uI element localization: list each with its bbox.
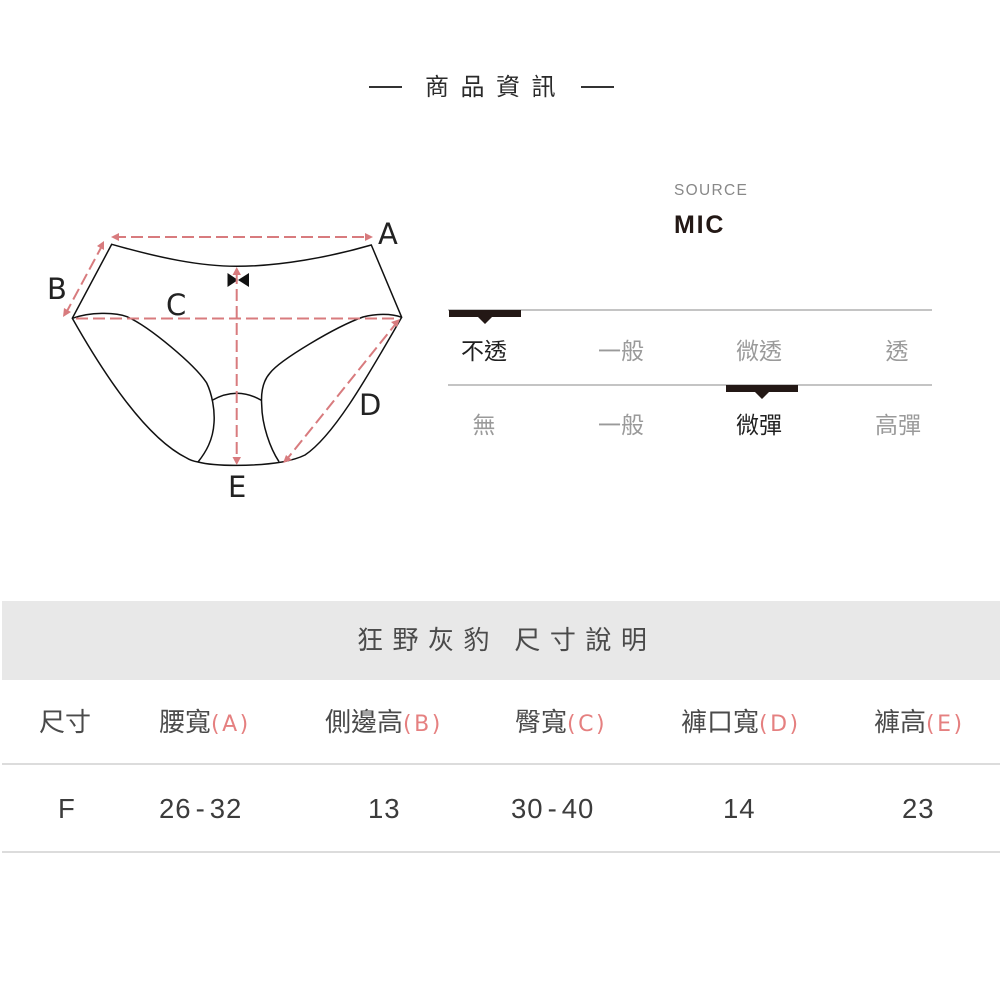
size table: 側邊高(B) — [325, 702, 443, 739]
diagram letters: A — [378, 217, 398, 251]
scale: opacity: 微透 — [736, 332, 782, 366]
size table heading band: 狂野灰豹 尺寸說明 — [357, 620, 656, 657]
size table: 臀寬(C) — [515, 702, 607, 739]
diagram letters — [47, 217, 398, 504]
scale: elasticity: 一般 — [598, 406, 644, 440]
size table: 30-40 — [511, 793, 594, 824]
diagram letters: E — [228, 470, 246, 504]
scale: elasticity: 高彈 — [875, 406, 921, 440]
size table: 褲高(E) — [874, 702, 965, 739]
measurement arrows — [66, 237, 398, 460]
scale: opacity: 透 — [886, 332, 908, 366]
diagram letters: D — [359, 388, 381, 422]
scale: opacity — [448, 309, 932, 366]
size table — [2, 702, 1000, 853]
size table: 腰寬(A) — [159, 702, 251, 739]
title: 商品資訊 — [425, 67, 567, 102]
size table: 14 — [723, 793, 756, 824]
size table: 23 — [902, 793, 935, 824]
garment outline — [72, 244, 402, 465]
arrow heads — [63, 233, 400, 465]
size table heading band — [2, 601, 1000, 680]
material name: MIC — [674, 211, 725, 239]
diagram: measurement of briefs — [47, 217, 402, 504]
opacity options: 不透 — [461, 332, 507, 366]
size table: F — [58, 793, 76, 824]
elasticity options: 無 — [472, 406, 496, 440]
size table: 13 — [368, 793, 401, 824]
source label: SOURCE — [674, 182, 748, 199]
size table: 尺寸 — [39, 702, 91, 739]
icon: bow — [228, 273, 249, 287]
size table: 26-32 — [159, 793, 242, 824]
scale: elasticity — [448, 384, 932, 440]
scale: elasticity: 微彈 — [736, 406, 782, 440]
elasticity marker — [726, 385, 798, 399]
value row — [58, 793, 935, 824]
scale: opacity: 一般 — [598, 332, 644, 366]
header row — [39, 702, 965, 739]
opacity marker — [449, 310, 521, 324]
diagram letters: C — [166, 288, 186, 322]
size table: 褲口寬(D) — [681, 702, 801, 739]
diagram letters: B — [47, 272, 67, 306]
